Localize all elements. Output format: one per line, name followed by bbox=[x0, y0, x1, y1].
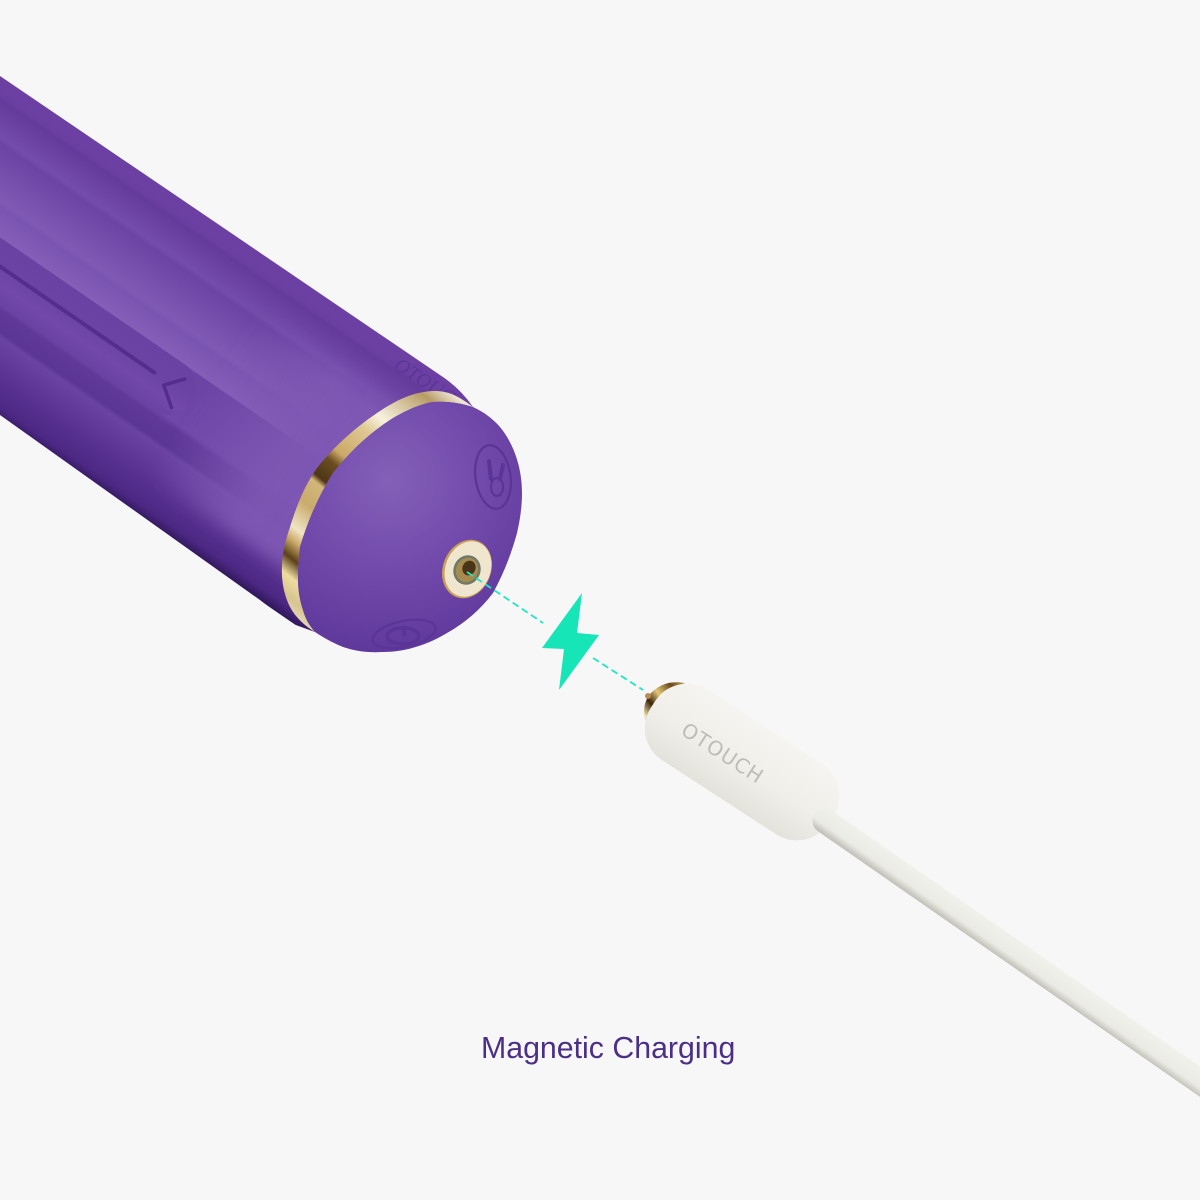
caption: Magnetic Charging bbox=[481, 1032, 735, 1065]
charging connection dashed line bbox=[467, 572, 643, 690]
slider recess panel bbox=[0, 238, 189, 410]
purple device body bbox=[0, 76, 473, 632]
gold ring bbox=[282, 391, 473, 632]
magnetic plug gold connector bbox=[644, 682, 692, 737]
body highlight near ring bbox=[180, 352, 388, 574]
embossed logo on body: OTOUC bbox=[390, 354, 459, 409]
device end cap bbox=[298, 402, 522, 652]
charging port bbox=[434, 532, 500, 606]
charging cable bbox=[825, 821, 1200, 1106]
plug logo: OTOUCH bbox=[677, 718, 768, 789]
icon: power button bbox=[370, 615, 438, 653]
magnetic plug bbox=[630, 669, 854, 855]
icon: bunny button bbox=[471, 443, 515, 511]
icon: lightning bolt bbox=[542, 593, 599, 690]
